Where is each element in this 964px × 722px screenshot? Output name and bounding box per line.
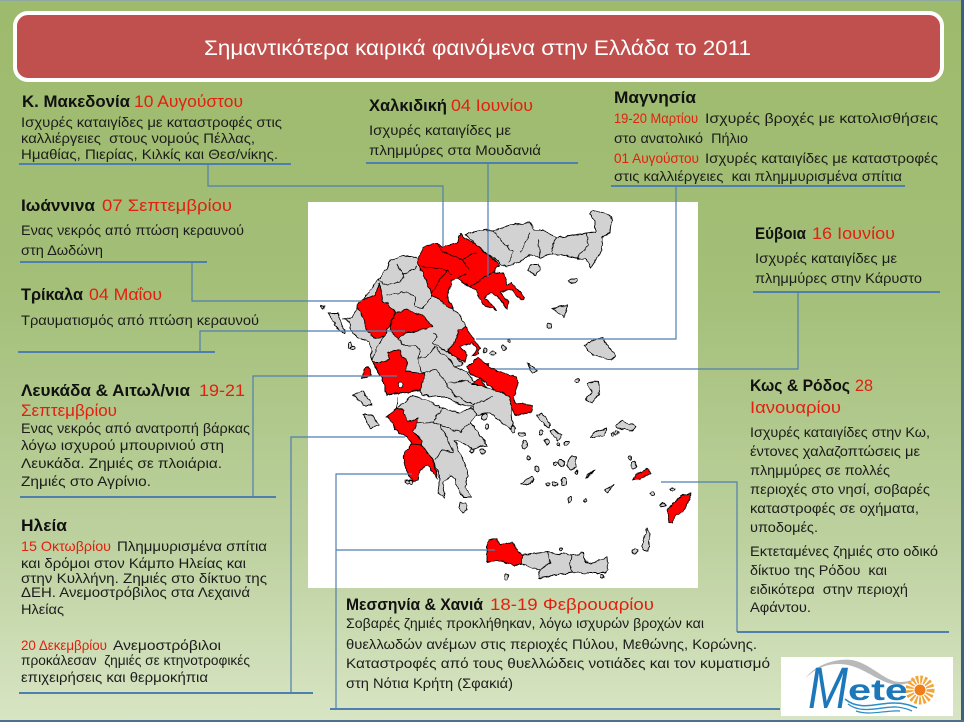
text block: Evia: πλημμύρες στην Κάρυστο bbox=[755, 270, 922, 286]
text block: Kos and Rhodes bbox=[750, 376, 938, 615]
text block: Trikala bbox=[21, 285, 259, 328]
text block: Kos and Rhodes: πλημμύρες σε πολλές bbox=[750, 462, 890, 478]
logo letters ete: ete bbox=[848, 674, 908, 707]
text block: Evia: Εύβοια bbox=[755, 224, 806, 243]
text block: Chalkidiki bbox=[369, 96, 541, 158]
connector lines bbox=[18, 163, 949, 709]
text block: Kos and Rhodes: ειδικότερα στην περιοχή bbox=[750, 581, 908, 597]
text block: Lefkada and Aitoloakarnania: λόγω ισχυρού μπουρινιού στη bbox=[21, 437, 224, 453]
text block: Magnesia bbox=[614, 88, 938, 184]
text block: Kos and Rhodes: περιοχές στο νησί, σοβαρές bbox=[750, 481, 930, 497]
text block: Kos and Rhodes: καταστροφές σε οχήματα, bbox=[750, 500, 919, 516]
text block: Messinia and Chania: θυελλωδών ανέμων στις περιοχές Πύλου, Μεθώνης, Κορώνης. bbox=[346, 636, 757, 652]
text block: Ilia: Ανεμοστρόβιλοι bbox=[113, 637, 221, 653]
text block: Magnesia: 01 Αυγούστου bbox=[614, 150, 699, 166]
text block: Lefkada and Aitoloakarnania: Σεπτεμβρίου bbox=[21, 401, 117, 420]
text block: Central Macedonia bbox=[21, 92, 282, 162]
text block: Central Macedonia: καλλιέργειες στους νομούς Πέλλας, bbox=[21, 130, 255, 146]
text block: Ilia: ΔΕΗ. Ανεμοστρόβιλος στα Λεχαινά bbox=[21, 584, 250, 600]
text block: Trikala: Τρίκαλα bbox=[21, 285, 84, 304]
text block: Lefkada and Aitoloakarnania: 19-21 bbox=[199, 381, 245, 400]
text block: Magnesia: Ισχυρές καταιγίδες με καταστροφές bbox=[705, 150, 938, 166]
text block: Lefkada and Aitoloakarnania: Λευκάδα & Αιτωλ/νια bbox=[21, 381, 191, 400]
text block: Ilia: και δρόμοι στον Κάμπο Ηλείας και bbox=[21, 555, 246, 571]
logo waves bbox=[845, 699, 917, 713]
text block: Central Macedonia: Ημαθίας, Πιερίας, Κιλκίς και Θεσ/νίκης. bbox=[21, 146, 278, 162]
text block: Magnesia: Ισχυρές βροχές με κατολισθήσεις bbox=[705, 110, 938, 126]
text block: Lefkada and Aitoloakarnania: Λευκάδα. Ζημιές σε πλοιάρια. bbox=[21, 455, 222, 471]
text block: Ioannina: Ενας νεκρός από πτώση κεραυνού bbox=[21, 222, 244, 238]
text block: Ilia: επιχειρήσεις και θερμοκήπια bbox=[21, 669, 208, 685]
mainland regions bbox=[343, 210, 612, 498]
text block: Messinia and Chania: 18-19 Φεβρουαρίου bbox=[490, 595, 654, 614]
text block: Kos and Rhodes: δίκτυο της Ρόδου και bbox=[750, 562, 887, 578]
text block: Ioannina: στη Δωδώνη bbox=[21, 242, 103, 258]
text block: Messinia and Chania: Καταστροφές από τους θυελλώδεις νοτιάδες και τον κυματισμό bbox=[346, 655, 770, 671]
text block: Chalkidiki: πλημμύρες στα Μουδανιά bbox=[369, 142, 541, 158]
text block: Lefkada and Aitoloakarnania bbox=[21, 381, 250, 489]
text block: Kos and Rhodes: έντονες χαλαζοπτώσεις με bbox=[750, 443, 920, 459]
text block: Ilia bbox=[21, 516, 267, 685]
text block: Ilia: προκάλεσαν ζημιές σε κτηνοτροφικές bbox=[21, 652, 250, 668]
text block: Ioannina: 07 Σεπτεμβρίου bbox=[102, 196, 232, 215]
text block: Ilia: 20 Δεκεμβρίου bbox=[21, 637, 107, 653]
text block: Chalkidiki: 04 Ιουνίου bbox=[451, 96, 533, 115]
text block: Magnesia: Μαγνησία bbox=[614, 88, 697, 107]
logo swoosh bbox=[805, 660, 918, 685]
text block: Kos and Rhodes: υποδομές. bbox=[750, 519, 818, 535]
text block: Magnesia: στις καλλιέργειες και πλημμυρισμένα σπίτια bbox=[614, 168, 902, 184]
text block: Ilia: 15 Οκτωβρίου bbox=[21, 538, 111, 554]
text block: Messinia and Chania: Σοβαρές ζημιές προκλήθηκαν, λόγω ισχυρών βροχών και bbox=[346, 615, 704, 631]
text block: Lefkada and Aitoloakarnania: Ζημιές στο Αγρίνιο. bbox=[21, 473, 151, 489]
text block: Messinia and Chania: στη Νότια Κρήτη (Σφακιά) bbox=[346, 675, 513, 691]
text block: Kos and Rhodes: Ισχυρές καταιγίδες στην Κω, bbox=[750, 424, 930, 440]
Crete bbox=[487, 538, 608, 578]
text block: Ilia: Ηλείας bbox=[21, 601, 64, 617]
text block: Chalkidiki: Ισχυρές καταιγίδες με bbox=[369, 122, 511, 138]
text block: Magnesia: 19-20 Μαρτίου bbox=[614, 110, 698, 126]
text block: Chalkidiki: Χαλκιδική bbox=[369, 96, 447, 115]
text block: Central Macedonia: 10 Αυγούστου bbox=[134, 92, 243, 111]
islands bbox=[322, 265, 692, 580]
logo: Meteo bbox=[781, 656, 953, 721]
text block: Ioannina bbox=[21, 196, 244, 258]
text block: Ilia: Ηλεία bbox=[21, 516, 68, 535]
text block: Kos and Rhodes: Ιανουαρίου bbox=[750, 398, 841, 417]
text block: Trikala: 04 Μαΐου bbox=[89, 285, 162, 304]
logo sun bbox=[910, 680, 930, 700]
text block: Kos and Rhodes: Κως & Ρόδος bbox=[750, 376, 850, 395]
text block: Trikala: Τραυματισμός από πτώση κεραυνού bbox=[21, 312, 259, 328]
text block: Central Macedonia: Ισχυρές καταιγίδες με καταστροφές στις bbox=[21, 114, 282, 130]
text block: Ilia: στην Κυλλήνη. Ζημιές στο δίκτυο της bbox=[21, 570, 267, 586]
map panel: Greece bbox=[308, 202, 698, 588]
text block: Lefkada and Aitoloakarnania: Ενας νεκρός από ανατροπή βάρκας bbox=[21, 420, 250, 436]
text block: Magnesia: στο ανατολικό Πήλιο bbox=[614, 130, 748, 146]
text block: Kos and Rhodes: Αφάντου. bbox=[750, 599, 811, 615]
text block: Central Macedonia: Κ. Μακεδονία bbox=[22, 92, 131, 111]
text block: Messinia and Chania bbox=[346, 595, 770, 691]
text block: Ilia: Πλημμυρισμένα σπίτια bbox=[117, 538, 267, 554]
highlighted prefectures bbox=[357, 233, 533, 481]
text block: Messinia and Chania: Μεσσηνία & Χανιά bbox=[346, 595, 483, 614]
title banner bbox=[15, 13, 942, 80]
text block: Evia bbox=[755, 224, 922, 286]
text block: Evia: Ισχυρές καταιγίδες με bbox=[755, 250, 897, 266]
text block: Kos and Rhodes: Εκτεταμένες ζημιές στο οδικό bbox=[750, 543, 938, 559]
text block: Evia: 16 Ιουνίου bbox=[812, 224, 895, 243]
logo letter M: M bbox=[808, 656, 849, 721]
title: Σημαντικότερα καιρικά φαινόμενα στην Ελλάδα το 2011 bbox=[204, 37, 751, 60]
text block: Ioannina: Ιωάννινα bbox=[21, 196, 96, 215]
text block: Kos and Rhodes: 28 bbox=[855, 376, 873, 395]
